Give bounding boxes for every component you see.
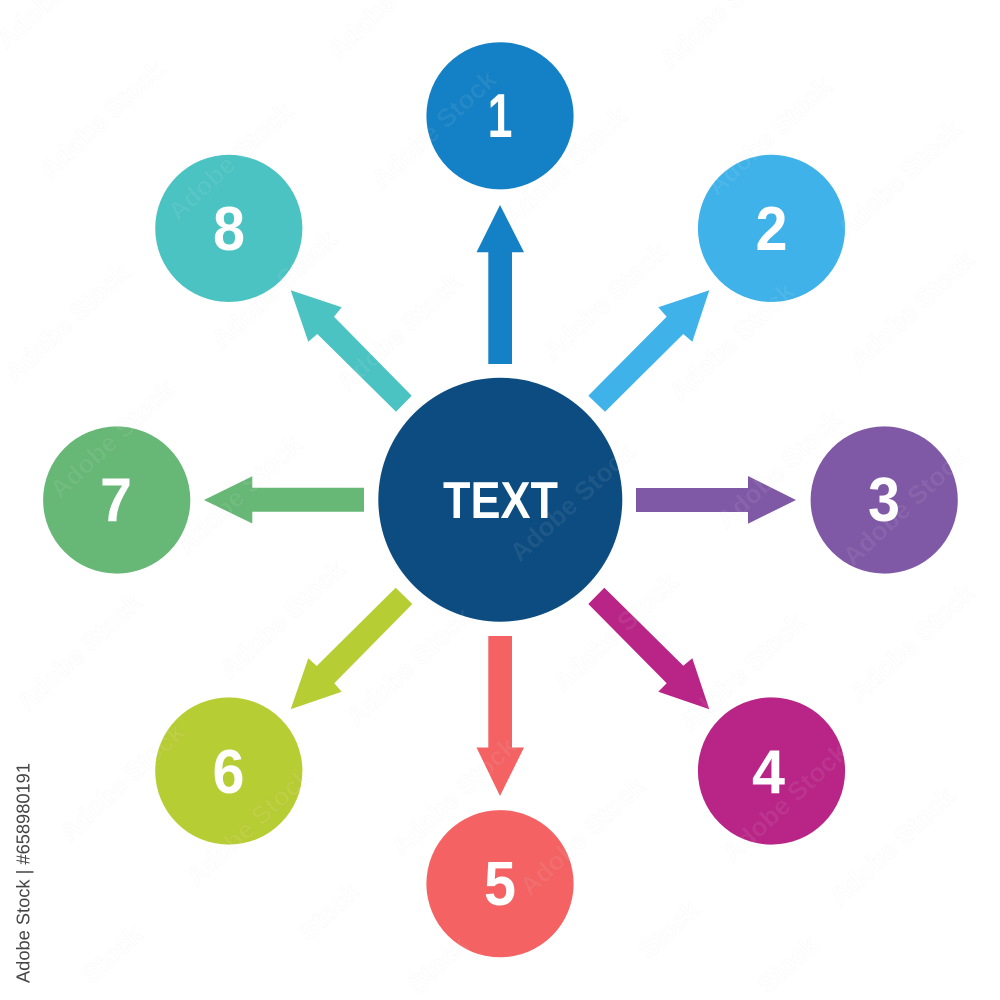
circle 1 xyxy=(426,42,574,189)
circle 1: 1 xyxy=(488,82,512,151)
watermark pattern: Adobe Stock xyxy=(837,441,974,571)
watermark pattern: Stock xyxy=(293,876,365,946)
arrow: center to 2 xyxy=(588,290,709,412)
circle 4: 4 xyxy=(752,738,785,807)
watermark pattern: Adobe Stock xyxy=(831,114,968,244)
arrow: center to 4 xyxy=(588,588,709,709)
circle 7 xyxy=(43,426,190,574)
watermark pattern: Stock xyxy=(76,919,148,989)
watermark pattern: Adobe Stock xyxy=(497,101,634,231)
watermark pattern: Stock xyxy=(402,929,474,999)
watermark pattern: Adobe Stock xyxy=(11,587,148,717)
circle 2: 2 xyxy=(756,195,788,264)
stock id side text: Adobe Stock | #658980191 xyxy=(14,763,34,983)
watermark pattern: Adobe Stock xyxy=(537,236,674,366)
watermark pattern: Adobe Stock xyxy=(824,781,961,911)
watermark pattern: Adobe Stock xyxy=(844,244,981,374)
watermark pattern: Adobe Stock xyxy=(514,771,651,901)
arrow: center to 3 xyxy=(636,476,796,524)
watermark pattern: Adobe Stock xyxy=(504,437,641,567)
circle 4 xyxy=(698,697,845,845)
watermark pattern: Adobe Stock xyxy=(206,224,343,354)
circle 7: 7 xyxy=(100,466,132,536)
watermark pattern: Adobe Stock xyxy=(664,276,801,406)
watermark pattern: Adobe Stock xyxy=(162,96,299,226)
watermark pattern: Adobe Stock xyxy=(214,554,351,684)
watermark pattern: Adobe Stock xyxy=(844,577,981,707)
watermark pattern: Adobe Stock xyxy=(711,404,848,534)
watermark pattern: Adobe Stock xyxy=(181,761,318,891)
circle 5 xyxy=(426,810,574,957)
watermark pattern: Adobe Stock xyxy=(331,267,468,397)
watermark pattern: Stock xyxy=(752,929,824,999)
watermark pattern: Adobe Stock xyxy=(674,607,811,737)
arrow: center to 7 xyxy=(204,476,364,524)
watermark pattern: Adobe Stock xyxy=(717,737,854,867)
circle 6: 6 xyxy=(212,738,244,807)
watermark pattern: Adobe Stock xyxy=(54,717,191,847)
circle 8 xyxy=(155,155,302,302)
arrow: center to 6 xyxy=(291,588,412,709)
circle 8: 8 xyxy=(213,195,245,264)
watermark pattern: Adobe Stock xyxy=(366,64,503,194)
watermark pattern: Adobe Stock xyxy=(0,257,136,387)
watermark pattern: Adobe Stock xyxy=(547,567,684,697)
circle 2 xyxy=(698,155,845,302)
center circle xyxy=(378,378,622,622)
watermark pattern: Adobe Stock xyxy=(44,374,181,504)
watermark pattern: Stock xyxy=(633,894,705,964)
arrow: center to 5 xyxy=(476,636,524,796)
circle 3 xyxy=(811,426,958,574)
watermark pattern: Adobe Stock xyxy=(34,54,171,184)
circle 5: 5 xyxy=(484,850,516,919)
watermark pattern: Adobe Stock xyxy=(341,601,478,731)
arrow: center to 8 xyxy=(291,290,412,412)
watermark pattern: Adobe Stock xyxy=(171,429,308,559)
watermark pattern: Adobe Stock xyxy=(701,71,838,201)
arrow: center to 1 xyxy=(476,205,524,364)
circle 6 xyxy=(155,697,302,845)
center circle: TEXT xyxy=(443,472,558,530)
circle 3: 3 xyxy=(868,466,900,535)
watermark pattern: Adobe Stock xyxy=(386,731,523,861)
